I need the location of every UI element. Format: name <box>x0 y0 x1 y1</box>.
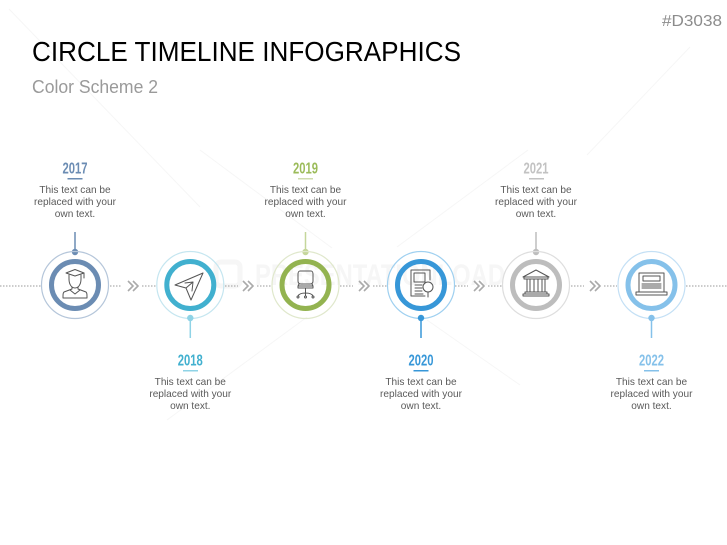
circle 2020 <box>388 252 454 318</box>
circle 2017 <box>42 252 108 318</box>
arrow 1 <box>128 281 138 291</box>
connector 2018 <box>187 315 194 338</box>
dotted timeline <box>0 285 727 287</box>
text block 2021: This text can be <box>500 185 572 196</box>
step 2018 <box>149 252 232 412</box>
connector 2019 <box>302 232 309 255</box>
connector 2021 <box>533 232 539 255</box>
text block 2018: replaced with your <box>149 389 232 400</box>
step 2022 <box>611 252 693 412</box>
text block 2022: This text can be <box>616 377 688 388</box>
icon: document and magnifier <box>411 270 433 297</box>
step 2017 <box>34 160 117 318</box>
text block 2018: This text can be <box>155 377 226 388</box>
title: CIRCLE TIMELINE INFOGRAPHICS <box>32 36 461 67</box>
connector 2022 <box>648 315 655 338</box>
step 2019 <box>265 160 347 318</box>
connector 2020 <box>418 315 424 338</box>
text block 2017 <box>34 178 117 220</box>
text block 2020: own text. <box>401 401 441 412</box>
circle 2018 <box>157 252 224 318</box>
arrow 4 <box>474 281 484 291</box>
arrow 5 <box>590 281 600 291</box>
arrow 3 <box>359 281 369 291</box>
text block 2019: This text can be <box>270 185 342 196</box>
year 2020: 2020 <box>408 352 434 370</box>
icon: paper plane <box>175 273 203 300</box>
text block 2022 <box>611 370 693 412</box>
icon: laptop <box>636 273 667 295</box>
text block 2017: This text can be <box>39 185 111 196</box>
icon: bank building <box>523 270 549 296</box>
circle 2021 <box>502 252 570 318</box>
text block 2022: replaced with your <box>611 389 693 400</box>
text block 2017: own text. <box>55 209 95 220</box>
arrow 2 <box>243 281 253 291</box>
text block 2020: This text can be <box>385 377 457 388</box>
year 2021: 2021 <box>524 160 549 178</box>
text block 2021 <box>495 178 578 220</box>
text block 2018: own text. <box>170 401 211 412</box>
icon: office chair <box>297 271 314 298</box>
step 2021 <box>495 160 578 318</box>
text block 2019 <box>265 178 347 220</box>
text block 2018 <box>149 370 232 412</box>
text block 2021: replaced with your <box>495 197 578 208</box>
year 2018: 2018 <box>178 352 203 370</box>
year 2019: 2019 <box>293 160 318 178</box>
icon: graduate <box>63 270 87 298</box>
connector 2017 <box>72 232 78 255</box>
text block 2017: replaced with your <box>34 197 117 208</box>
year 2022: 2022 <box>639 352 664 370</box>
product code: #D3038 <box>662 13 722 30</box>
step 2020 <box>380 252 463 412</box>
watermark: PRESENTATIONLOAD <box>255 259 505 292</box>
circle 2019 <box>272 252 339 318</box>
text block 2019: own text. <box>285 209 326 220</box>
subtitle: Color Scheme 2 <box>32 77 158 97</box>
text block 2019: replaced with your <box>265 197 347 208</box>
text block 2020: replaced with your <box>380 389 463 400</box>
circle 2022 <box>618 252 685 318</box>
text block 2021: own text. <box>516 209 556 220</box>
text block 2020 <box>380 370 463 412</box>
year 2017: 2017 <box>62 160 88 178</box>
text block 2022: own text. <box>631 401 672 412</box>
